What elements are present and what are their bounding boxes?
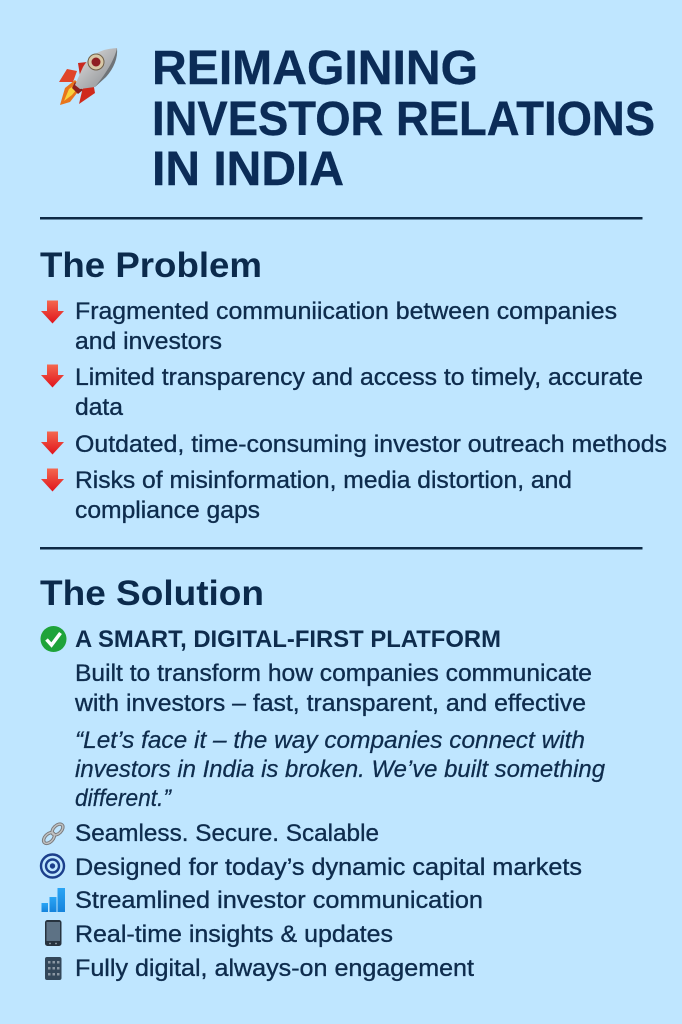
panel: problem list [41,298,667,524]
problem item 2 [75,364,643,421]
problem item 2: Limited transparency and access to timely, accurate [75,364,643,391]
icon: red down arrow [41,364,64,388]
icon: target [41,854,64,878]
problem item 4: compliance gaps [75,497,260,524]
icon: green check [40,626,66,652]
title [152,42,655,196]
solution description: with investors – fast, transparent, and effective [74,690,586,717]
problem item 3: Outdated, time-consuming investor outreach methods [75,431,667,458]
icon: red down arrow [41,300,64,324]
quote: investors in India is broken. We’ve built something [75,756,606,783]
solution description: Built to transform how companies communicate [75,660,592,687]
quote [75,727,606,812]
feature: real-time: Real-time insights & updates [75,921,393,948]
quote: different.” [75,785,172,812]
icon: red down arrow [41,468,64,492]
icon: link [42,822,65,845]
panel: solution [40,626,606,982]
problem item 1 [75,298,617,355]
title: REIMAGINING [152,42,478,95]
problem item 4 [75,467,572,524]
solution description [74,660,592,717]
heading: The Problem: The Problem [40,246,262,285]
heading: The Solution: The Solution [40,574,264,613]
icon: phone [45,920,62,946]
feature: always-on: Fully digital, always-on engagement [75,955,474,982]
title: INVESTOR RELATIONS [152,93,655,146]
icon: bar chart [42,888,65,912]
icon: red down arrow [41,432,64,454]
feature: designed: Designed for today’s dynamic capital markets [75,854,582,881]
feature: streamlined: Streamlined investor communication [75,887,483,914]
solution subheading: A SMART, DIGITAL-FIRST PLATFORM [75,626,501,653]
problem item 4: Risks of misinformation, media distortion, and [75,467,572,494]
icon: rocket [59,48,117,105]
title: IN INDIA [152,143,344,196]
icon: keypad [45,957,62,980]
problem item 2: data [75,394,124,421]
problem item 1: and investors [75,328,222,355]
quote: “Let’s face it – the way companies connect with [75,727,585,754]
feature: seamless: Seamless. Secure. Scalable [75,820,379,847]
problem item 1: Fragmented communiication between companies [75,298,617,325]
